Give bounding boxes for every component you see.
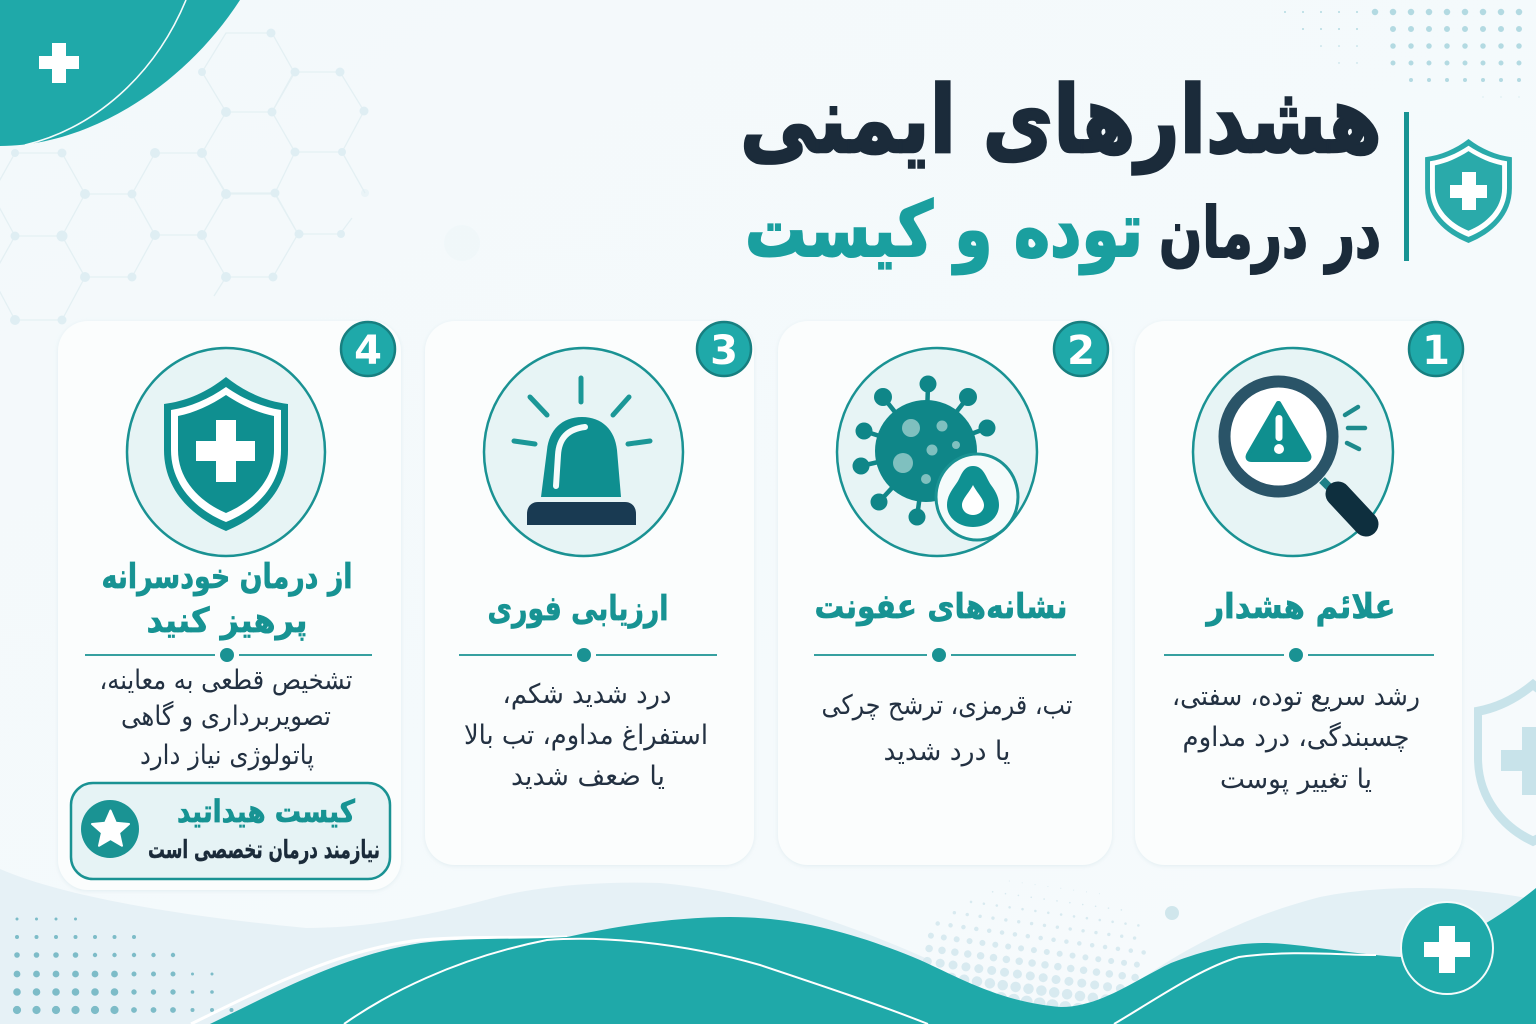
card 4 number badge — [341, 322, 395, 376]
card 1 icon: magnifier with warning — [1193, 348, 1393, 556]
card 2 heading: نشانه‌های عفونت — [814, 587, 1068, 627]
card 4 body text — [100, 665, 352, 771]
card 3 body text — [464, 679, 708, 792]
icon: header shield — [1425, 139, 1512, 243]
title line 1: هشدارهای ایمنی — [740, 66, 1382, 175]
card 3 body text: درد شدید شکم، — [502, 679, 672, 710]
card 1 body text: رشد سریع توده، سفتی، — [1172, 681, 1420, 712]
card 3 heading: ارزیابی فوری — [488, 589, 668, 629]
hexagon background pattern — [0, 28, 480, 325]
card 1 body text — [1172, 681, 1420, 795]
card 2 body text: یا درد شدید — [884, 736, 1010, 767]
card 4 — [58, 321, 401, 890]
callout subtitle: نیازمند درمان تخصصی است — [148, 835, 380, 864]
card 1 background — [1135, 321, 1462, 865]
title line 2 teal part: توده و کیست — [745, 185, 1143, 275]
card 1 number badge — [1409, 322, 1463, 376]
top-left corner blob with plus — [0, 0, 240, 146]
faint side shield — [1478, 685, 1536, 841]
card 3 number badge: 3 — [710, 328, 738, 374]
top-right dot grid — [1285, 12, 1536, 97]
card 4 background — [58, 321, 401, 890]
card 2 icon: virus and drop — [837, 348, 1037, 556]
card 2 body text: تب، قرمزی، ترشح چرکی — [822, 690, 1072, 721]
header divider bar — [1404, 112, 1409, 261]
card 4 body text: تصویربرداری و گاهی — [121, 700, 331, 732]
card 3 body text: استفراغ مداوم، تب بالا — [464, 720, 708, 751]
card 3 — [425, 321, 754, 865]
title line 2 dark part: در درمان — [1159, 192, 1381, 274]
teal bottom wave — [191, 888, 1536, 1024]
card 2 — [778, 321, 1112, 865]
card 4 heading: پرهیز کنید — [146, 601, 308, 641]
card 4 icon: shield — [127, 348, 325, 556]
card 1 body text: چسبندگی، درد مداوم — [1182, 721, 1410, 753]
card 4 body text: پاتولوژی نیاز دارد — [140, 740, 314, 771]
callout title: کیست هیداتید — [177, 794, 356, 830]
card 1 body text: یا تغییر پوست — [1220, 764, 1372, 795]
card 3 icon: alarm beacon — [484, 348, 683, 556]
background light wave left — [0, 869, 930, 1024]
card 1 heading: علائم هشدار — [1205, 587, 1396, 627]
card 2 number badge: 2 — [1067, 328, 1095, 374]
card 4 heading: از درمان خودسرانه — [102, 557, 352, 597]
bottom-center halftone dots — [924, 871, 1158, 1018]
card 2 number badge — [1054, 322, 1108, 376]
card 4 number badge: 4 — [354, 328, 382, 374]
card 2 background — [778, 321, 1112, 865]
background light wave right — [1140, 888, 1536, 1000]
card 2 divider — [814, 648, 1076, 662]
card 4 body text: تشخیص قطعی به معاینه، — [100, 665, 352, 696]
small floating dot — [1165, 906, 1179, 920]
bottom-right plus badge — [1401, 902, 1493, 994]
card 3 background — [425, 321, 754, 865]
card 1 number badge: 1 — [1422, 328, 1450, 374]
card 3 divider — [459, 648, 717, 662]
icon: star — [81, 800, 139, 858]
card 4 divider — [85, 648, 372, 662]
bottom-left dot grid — [17, 919, 235, 1010]
card 1 — [1135, 321, 1463, 865]
card 2 body text — [822, 690, 1072, 767]
callout: hydatid cyst — [71, 783, 390, 879]
card 3 body text: یا ضعف شدید — [511, 761, 665, 792]
card 4 heading — [102, 557, 352, 641]
card 3 number badge — [697, 322, 751, 376]
card 1 divider — [1164, 648, 1434, 662]
